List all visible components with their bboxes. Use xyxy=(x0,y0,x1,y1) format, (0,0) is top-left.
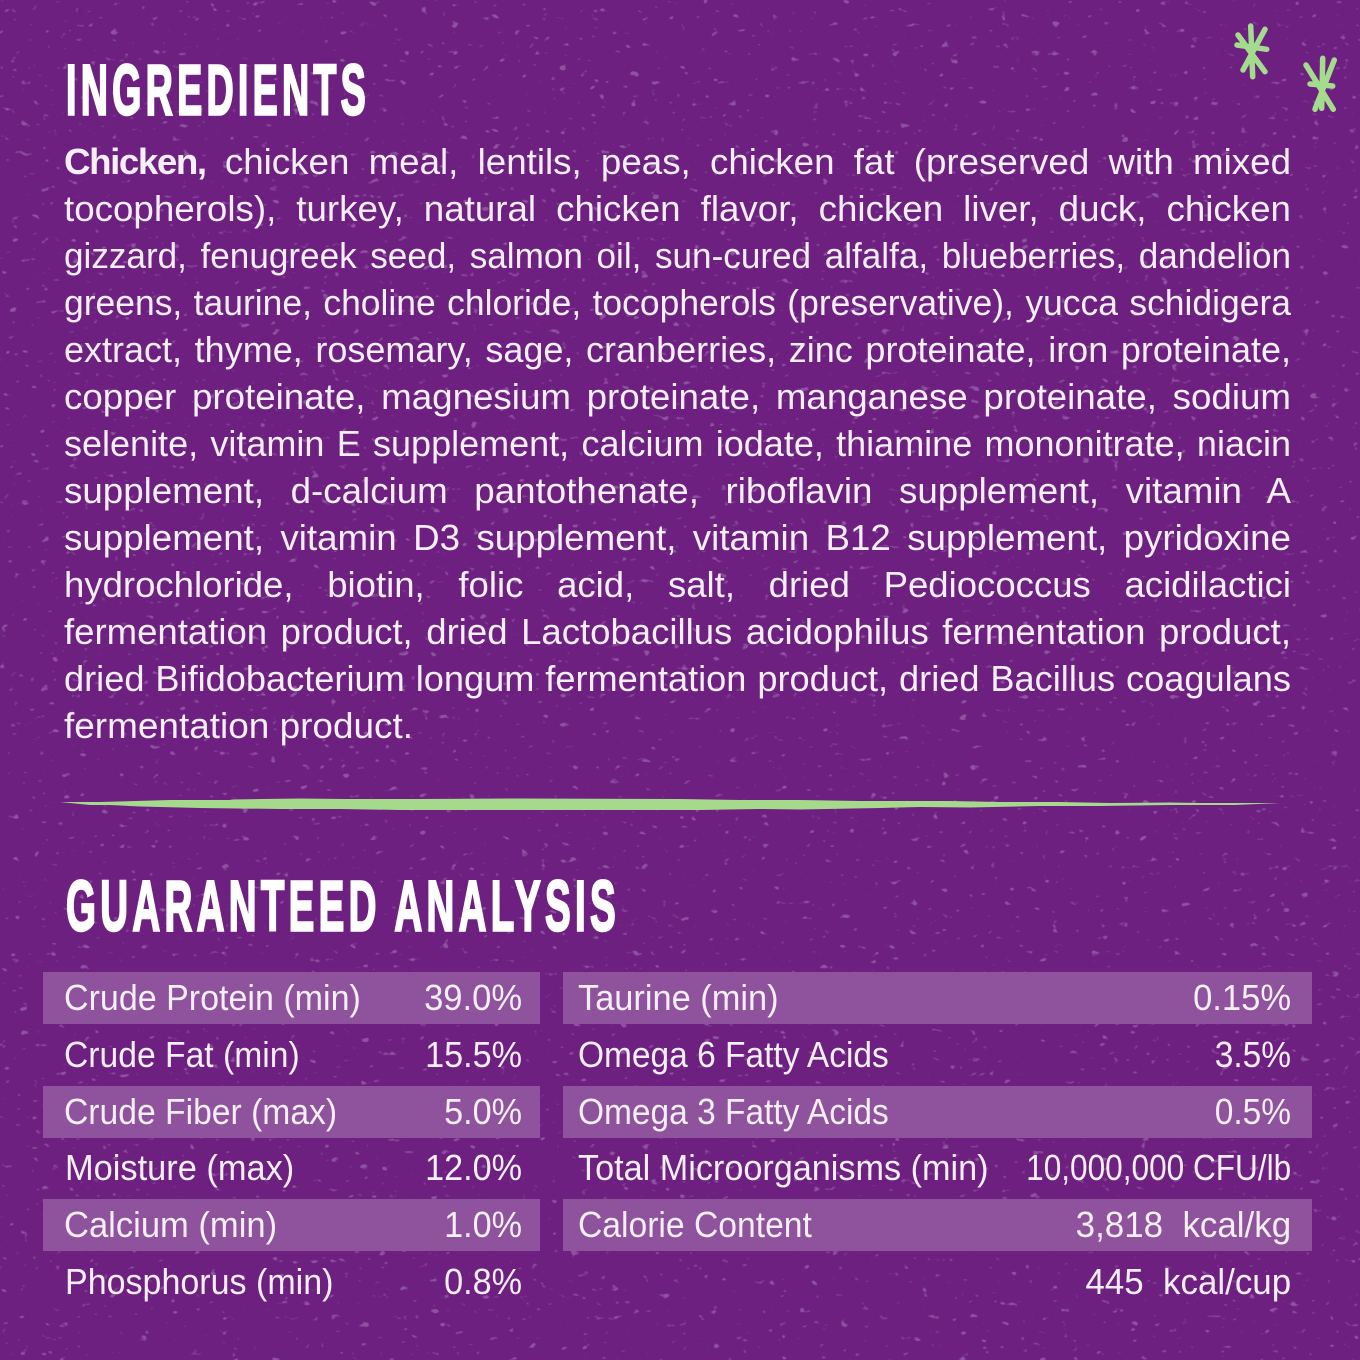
ingredients text block: fermentation product. xyxy=(64,705,413,746)
analysis table: 39.0% xyxy=(424,977,522,1018)
ingredients text block: extract, thyme, rosemary, sage, cranberries, zinc proteinate, iron proteinate, xyxy=(64,329,1291,370)
analysis table: 5.0% xyxy=(444,1091,522,1132)
analysis table: 10,000,000 CFU/lb xyxy=(1026,1147,1291,1188)
heading: ingredients: INGREDIENTS xyxy=(66,52,370,130)
analysis table: 0.15% xyxy=(1193,977,1291,1018)
analysis table: 0.5% xyxy=(1215,1091,1291,1132)
ingredients text block: fermentation product, dried Lactobacillus acidophilus fermentation product, xyxy=(64,611,1291,652)
analysis table: Crude Fat (min) xyxy=(64,1034,300,1075)
analysis table: 3,818 kcal/kg xyxy=(1076,1204,1291,1245)
analysis table: 3.5% xyxy=(1215,1034,1291,1075)
analysis table xyxy=(43,972,1312,1302)
analysis table: Phosphorus (min) xyxy=(65,1261,333,1302)
ingredients text block: hydrochloride, biotin, folic acid, salt, dried Pediococcus acidilactici xyxy=(64,564,1291,605)
analysis table: 0.8% xyxy=(444,1261,522,1302)
ingredients text block: dried Bifidobacterium longum fermentation product, dried Bacillus coagulans xyxy=(64,658,1291,699)
ingredients text block: copper proteinate, magnesium proteinate, manganese proteinate, sodium xyxy=(64,376,1291,417)
ingredients text block xyxy=(64,141,1291,746)
analysis table: Crude Protein (min) xyxy=(64,977,361,1018)
analysis table: Total Microorganisms (min) xyxy=(578,1147,988,1188)
ingredients text block: gizzard, fenugreek seed, salmon oil, sun-cured alfalfa, blueberries, dandelion xyxy=(64,235,1291,276)
analysis table: Omega 3 Fatty Acids xyxy=(578,1091,889,1132)
ingredients text block: supplement, vitamin D3 supplement, vitamin B12 supplement, pyridoxine xyxy=(64,517,1291,558)
ingredients text block: selenite, vitamin E supplement, calcium iodate, thiamine mononitrate, niacin xyxy=(64,423,1291,464)
analysis table: 15.5% xyxy=(425,1034,522,1075)
analysis table: Taurine (min) xyxy=(578,977,779,1018)
heading: guaranteed analysis: GUARANTEED ANALYSIS xyxy=(66,868,620,946)
analysis table: 1.0% xyxy=(444,1204,522,1245)
ingredients text block: supplement, d-calcium pantothenate, riboflavin supplement, vitamin A xyxy=(64,470,1291,511)
analysis table: 12.0% xyxy=(425,1147,522,1188)
analysis table: Calcium (min) xyxy=(64,1204,277,1245)
analysis table: Moisture (max) xyxy=(65,1147,294,1188)
ingredients text block: Chicken, chicken meal, lentils, peas, chicken fat (preserved with mixed xyxy=(64,141,1291,182)
analysis table: Omega 6 Fatty Acids xyxy=(578,1034,889,1075)
analysis table: 445 kcal/cup xyxy=(1085,1261,1291,1302)
ingredients text block: greens, taurine, choline chloride, tocopherols (preservative), yucca schidigera xyxy=(64,282,1291,323)
analysis table: Crude Fiber (max) xyxy=(64,1091,337,1132)
ingredients text block: tocopherols), turkey, natural chicken flavor, chicken liver, duck, chicken xyxy=(64,188,1291,229)
analysis table: Calorie Content xyxy=(578,1204,812,1245)
